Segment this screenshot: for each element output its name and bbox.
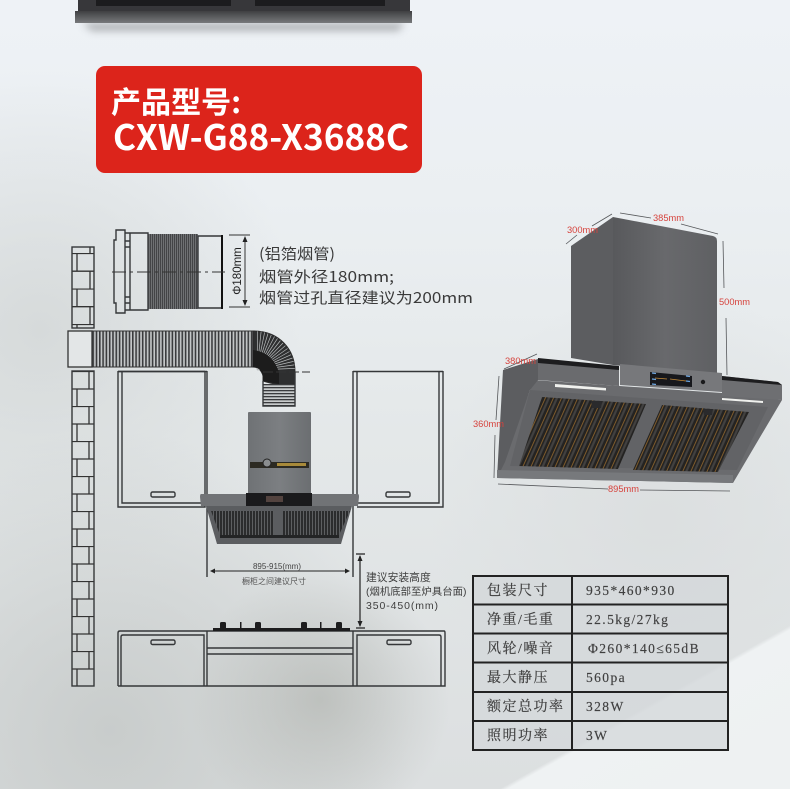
duct description xyxy=(259,243,473,308)
row: fan and noise: 风轮/噪音 xyxy=(487,641,554,657)
installed range hood xyxy=(200,412,359,544)
row: max static pressure xyxy=(487,669,626,686)
product render with dimensions xyxy=(473,213,782,494)
ceiling duct with elbow xyxy=(68,331,310,406)
row: rated power: 328W xyxy=(586,699,625,714)
row: package size xyxy=(487,582,676,599)
model label: 产品型号: xyxy=(111,78,241,122)
top band right xyxy=(722,376,782,400)
dimension labels: 500mm xyxy=(719,297,750,307)
side face xyxy=(497,359,538,478)
right filter xyxy=(633,405,749,472)
duct description: 烟管过孔直径建议为200mm xyxy=(259,287,473,308)
dimension labels: 380mm xyxy=(505,356,536,366)
row: weight xyxy=(487,612,669,628)
row: max static pressure: 560pa xyxy=(586,670,626,685)
dimension labels: 895mm xyxy=(608,484,639,494)
diameter dimension: Φ180mm xyxy=(232,247,244,295)
chimney xyxy=(571,217,717,375)
dimension labels: 385mm xyxy=(653,213,684,223)
canopy xyxy=(497,358,782,483)
width value: 895-915(mm) xyxy=(253,562,301,571)
lower lip and frame xyxy=(497,380,782,483)
brick wall lower xyxy=(72,371,94,686)
row: max static pressure: 最大静压 xyxy=(487,669,549,686)
elbow xyxy=(253,331,295,385)
duct description: (铝箔烟管) xyxy=(259,243,335,264)
installation height text: 建议安装高度 xyxy=(366,570,431,584)
row: package size: 935*460*930 xyxy=(586,583,676,598)
installation height text: 350-450(mm) xyxy=(366,600,439,612)
installation height dimension xyxy=(356,554,365,628)
base cabinets xyxy=(118,631,445,686)
left filter xyxy=(519,397,646,469)
row: lighting power: 照明功率 xyxy=(487,728,549,744)
upper cabinets xyxy=(118,371,443,577)
installation height text xyxy=(366,570,466,612)
row: weight: 22.5kg/27kg xyxy=(586,612,669,627)
foil duct drawing xyxy=(112,230,250,313)
row: fan and noise: Φ260*140≤65dB xyxy=(588,641,700,656)
gas stove xyxy=(213,622,350,631)
control panel xyxy=(620,364,722,392)
dimension labels: 360mm xyxy=(473,419,504,429)
dimension lines xyxy=(494,213,730,491)
installation height text: (烟机底部至炉具台面) xyxy=(366,585,466,598)
top hood edge cropped product photo xyxy=(75,0,412,31)
model badge xyxy=(96,66,422,173)
row: fan and noise xyxy=(487,641,700,657)
row: lighting power xyxy=(487,728,608,744)
row: rated power: 额定总功率 xyxy=(487,698,564,715)
row: package size: 包装尺寸 xyxy=(487,582,549,599)
brick wall upper xyxy=(72,247,94,328)
dimension labels: 300mm xyxy=(567,225,598,235)
top band left xyxy=(538,359,619,386)
row: rated power xyxy=(487,698,625,715)
row: lighting power: 3W xyxy=(586,728,608,743)
specification table xyxy=(472,575,729,751)
model number: CXW-G88-X3688C xyxy=(113,110,409,161)
duct description: 烟管外径180mm; xyxy=(259,266,394,287)
dimension labels xyxy=(473,213,750,494)
row: weight: 净重/毛重 xyxy=(487,612,554,628)
cabinet width dimension xyxy=(210,562,350,574)
width caption: 橱柜之间建议尺寸 xyxy=(242,576,306,586)
